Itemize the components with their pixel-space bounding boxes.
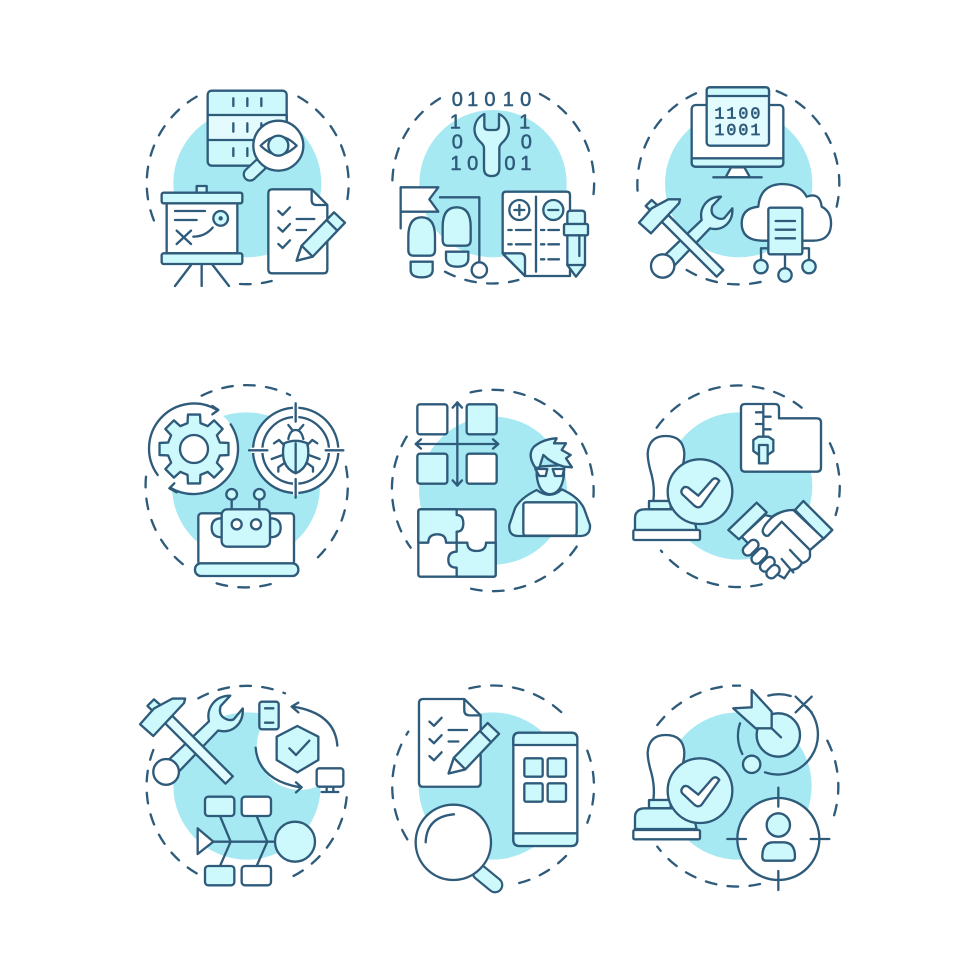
icon: binary digits: 1 <box>450 111 461 133</box>
icon: binary digits: 1 <box>467 89 478 111</box>
icon: cycle arrows <box>149 403 238 494</box>
icon: binary digits: 1 <box>503 89 514 111</box>
panel: grid, puzzle and developer <box>392 390 594 591</box>
icon: shield check <box>277 726 318 772</box>
panel: data review, strategy and checklist <box>147 91 349 286</box>
icon: handshake <box>728 501 832 580</box>
icon: binary digits: 0 <box>504 153 516 175</box>
icon: fishbone diagram <box>198 797 315 885</box>
background blob <box>172 412 320 560</box>
dashed ring <box>147 97 349 284</box>
icon: strategy easel <box>162 186 242 286</box>
icon: server rack <box>208 91 287 166</box>
icon: binary digits: 0 <box>452 89 463 111</box>
icon: wrench <box>665 197 732 265</box>
icon: footprints <box>408 207 471 277</box>
icon: user in crosshair <box>727 788 829 890</box>
panel: checklist, app and search <box>392 685 594 885</box>
icon: wrench ball end <box>651 254 674 278</box>
icon: phone <box>259 702 279 729</box>
icon: binary code window: 1001 <box>714 122 762 141</box>
icon: bug in target <box>249 403 343 498</box>
icon: phone with app grid <box>513 733 577 846</box>
background blob <box>665 412 812 560</box>
icon: cloud document network <box>742 184 831 282</box>
icon: binary digits: 1 <box>450 153 462 175</box>
dashed ring <box>147 686 347 880</box>
panel: approval, zip folder and handshake <box>633 385 840 587</box>
background blob <box>665 110 812 257</box>
icon: checklist document with pencil <box>419 699 499 787</box>
icon: zip folder <box>741 404 821 472</box>
icon: four square grid with arrows <box>416 402 498 486</box>
background blob <box>173 712 321 860</box>
icon: small monitor <box>317 768 343 792</box>
dashed ring <box>392 94 594 283</box>
dashed ring <box>392 390 594 591</box>
background blob <box>419 712 566 860</box>
panel: approval, goal target and user target <box>633 686 838 890</box>
icon: gear <box>160 415 228 483</box>
icon: puzzle <box>418 509 496 577</box>
icon: desktop monitor <box>692 105 783 177</box>
icon: binary digits: 1 <box>520 153 532 175</box>
icon: binary digits: 0 <box>467 153 478 175</box>
icon: binary digits: 0 <box>520 89 531 111</box>
dashed ring <box>657 686 838 887</box>
panel: binary wrench, footsteps and pros and cons <box>392 89 594 283</box>
icon: shield tick <box>289 741 309 755</box>
panel: tools, security cycle and fishbone <box>140 686 347 885</box>
icon: checklist document with pencil <box>268 189 345 273</box>
icon: binary code window: 1100 <box>714 105 762 124</box>
icon: hammer <box>639 199 723 277</box>
icon: wrench <box>475 114 509 176</box>
icon: binary digits: 0 <box>484 89 496 111</box>
background blob <box>419 110 567 257</box>
icon: approval stamp <box>633 436 732 540</box>
icon: sync arrows <box>256 703 337 792</box>
background blob <box>664 712 812 860</box>
icon: magnifier with eye <box>250 121 303 174</box>
icon: binary digits: 0 <box>452 131 463 153</box>
icon: approval stamp <box>633 735 732 839</box>
icon: robot on laptop <box>195 489 298 576</box>
icon: developer with laptop <box>509 438 590 536</box>
background blob <box>173 109 321 257</box>
panel: automation, bug target and robot <box>146 385 348 587</box>
icon: goal target with arrow <box>733 690 818 774</box>
panel: computer code, tools and cloud <box>637 87 839 284</box>
icon: binary code window <box>707 87 769 146</box>
dashed ring <box>146 385 348 587</box>
icon: marker pen <box>564 211 588 277</box>
icon: binary digits <box>450 89 532 175</box>
dashed ring <box>657 385 840 587</box>
icon: flag and route <box>401 187 487 278</box>
icon: pros and cons sheet <box>503 192 570 276</box>
dashed ring <box>637 91 839 284</box>
dashed ring <box>392 685 594 884</box>
icon: binary digits: 0 <box>521 131 532 153</box>
icon: binary digits: 1 <box>519 111 530 133</box>
icon: hammer and wrench <box>140 696 243 785</box>
icon: magnifying glass <box>416 805 495 885</box>
background blob <box>419 417 567 565</box>
icon: white cutout behind shield <box>257 703 343 790</box>
icon: white backing for gear <box>150 405 238 493</box>
